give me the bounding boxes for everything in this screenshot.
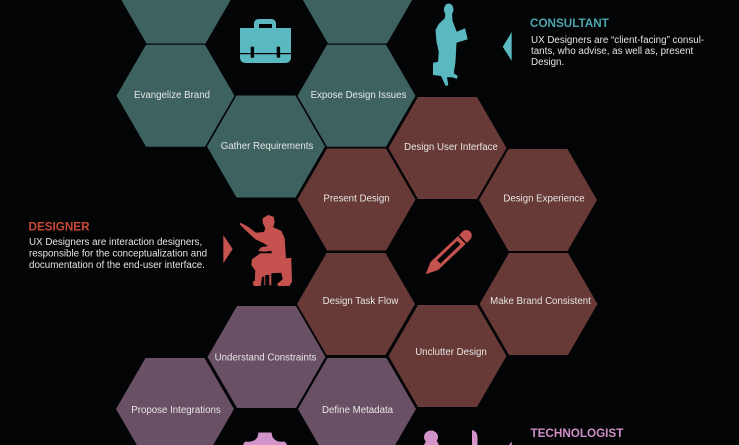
hexagon: Design Experience xyxy=(479,149,597,251)
icon: designer figure xyxy=(239,215,292,286)
text: consultant description: UX Designers are “client-facing” consul- xyxy=(531,35,704,46)
panel: technologist hexagon cluster xyxy=(116,306,416,445)
hexagon: Understand Constraints xyxy=(208,306,326,408)
hexagon: Design Task Flow: Design Task Flow xyxy=(323,296,399,307)
hexagon: Design User Interface: Design User Interface xyxy=(404,142,498,153)
hexagon: Expose Design Issues xyxy=(298,45,416,147)
hexagon: Gather Requirements xyxy=(207,96,325,198)
panel: designer hexagon cluster xyxy=(297,97,598,407)
hexagon: Define Metadata: Define Metadata xyxy=(322,405,394,416)
icon: briefcase xyxy=(240,19,291,63)
arrow: technologist xyxy=(509,442,512,445)
hexagon: cropped top left xyxy=(117,0,235,44)
hexagon: Make Brand Consistent xyxy=(480,253,598,355)
hexagon: Define Metadata xyxy=(298,358,416,445)
hexagon: Present Design xyxy=(298,148,416,250)
hexagon: Gather Requirements: Gather Requirements xyxy=(221,141,313,152)
hexagon: Propose Integrations xyxy=(116,358,234,445)
hexagon: Expose Design Issues: Expose Design Issues xyxy=(311,90,407,101)
arrow: consultant xyxy=(503,32,512,61)
text: consultant description: tants, who advise, as well as, present xyxy=(531,46,694,57)
heading: technologist: TECHNOLOGIST xyxy=(530,427,624,440)
text: designer description: documentation of the end-user interface. xyxy=(29,260,205,271)
hexagon: Design Task Flow xyxy=(297,253,415,355)
text: designer description: UX Designers are interaction designers, xyxy=(29,237,202,248)
hexagon: Evangelize Brand xyxy=(116,45,234,147)
hexagon: Present Design: Present Design xyxy=(323,194,390,204)
icon: technologist figure xyxy=(424,430,478,445)
hexagon: Make Brand Consistent: Make Brand Consistent xyxy=(490,296,591,307)
hexagon: cropped top right xyxy=(298,0,416,44)
hexagon: Understand Constraints: Understand Constraints xyxy=(215,352,317,364)
icon: gear xyxy=(243,432,287,445)
text: designer description: responsible for the conceptualization and xyxy=(29,248,207,260)
panel: consultant hexagon cluster xyxy=(116,0,416,198)
hexagon: Unclutter Design xyxy=(388,305,506,407)
icon: consultant figure xyxy=(433,4,468,86)
icon: pencil xyxy=(426,230,472,274)
hexagon: Evangelize Brand: Evangelize Brand xyxy=(134,90,210,101)
text: consultant description: Design. xyxy=(531,57,564,68)
heading: designer: DESIGNER xyxy=(28,220,90,234)
hexagon: Propose Integrations: Propose Integrations xyxy=(131,405,221,416)
arrow: designer xyxy=(223,235,233,263)
hexagon: Design Experience: Design Experience xyxy=(503,194,585,204)
hexagon: Unclutter Design: Unclutter Design xyxy=(415,347,487,358)
heading: consultant: CONSULTANT xyxy=(530,17,610,30)
hexagon: Design User Interface xyxy=(388,97,506,199)
